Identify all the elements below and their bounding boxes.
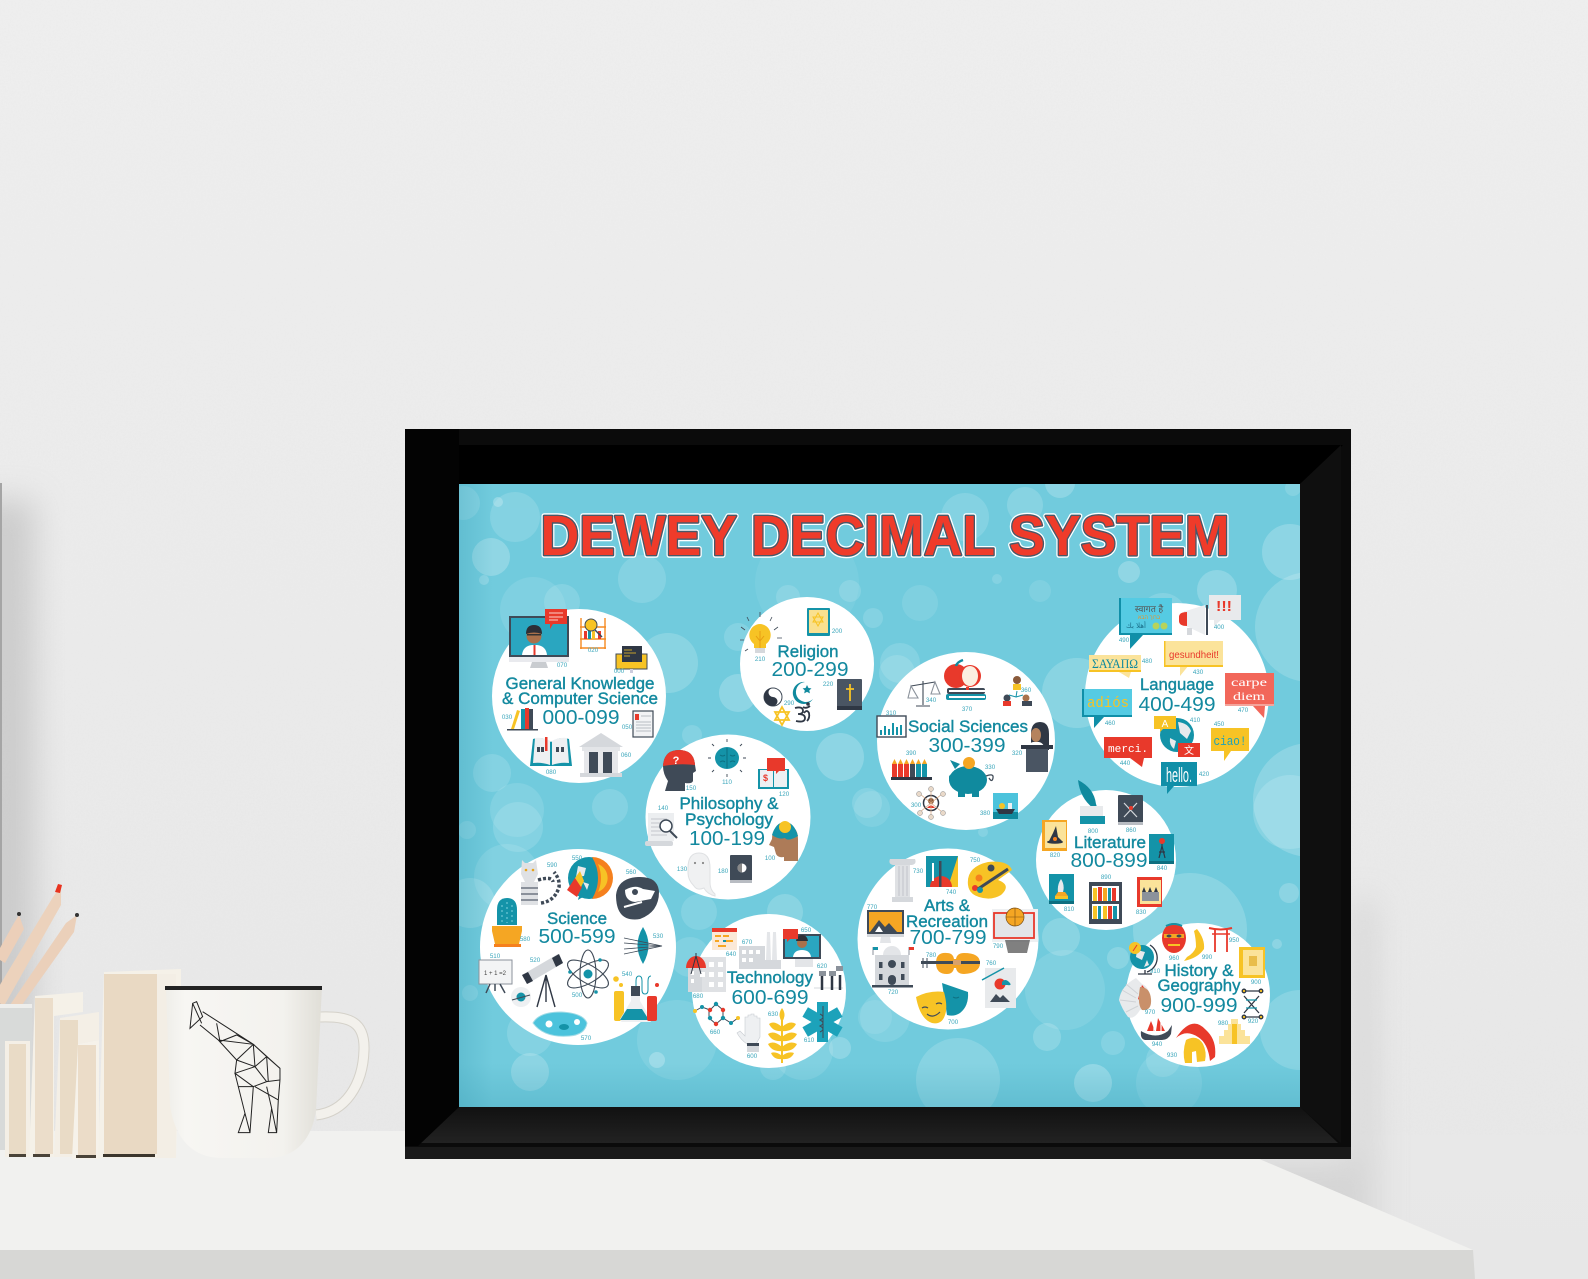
icon: atom — [564, 950, 612, 998]
number labels: 050 — [622, 724, 633, 731]
panel: technology 600-699 — [686, 914, 846, 1068]
number labels: 680 — [693, 993, 704, 1000]
heading: history and geography: 900-999 — [1160, 994, 1238, 1017]
icon: whiteboard — [479, 960, 512, 993]
icon: torii gate — [1209, 928, 1232, 952]
number labels: 940 — [1152, 1041, 1163, 1048]
icon: dark bookshelf — [1089, 882, 1122, 924]
icon: man on monitor — [783, 929, 821, 967]
number labels: 580 — [520, 936, 531, 943]
number labels: 360 — [1021, 687, 1032, 694]
heading: science — [538, 909, 616, 948]
frame outer — [405, 429, 1351, 1159]
icon: castle book — [1137, 877, 1162, 907]
icon: merci bubble — [1104, 737, 1152, 767]
number labels: 610 — [804, 1037, 815, 1044]
number labels: 950 — [1229, 937, 1240, 944]
icon: gesundheit bubble: gesundheit! — [1169, 649, 1219, 661]
icon: scales — [908, 681, 940, 706]
icon: amoeba — [533, 1012, 587, 1036]
number labels: 990 — [1202, 954, 1213, 961]
number labels — [1050, 827, 1168, 916]
number labels: 770 — [867, 904, 878, 911]
heading: technology: 600-699 — [732, 986, 808, 1009]
heading: history and geography: History & — [1164, 961, 1234, 980]
icon: tribal mask — [1162, 923, 1186, 953]
number labels: 200 — [832, 628, 843, 635]
icon: adios bubble — [1082, 689, 1132, 728]
heading: arts and recreation: 700-799 — [910, 926, 986, 949]
icon: document with magnifier — [645, 813, 677, 846]
icon: lemur — [521, 860, 559, 905]
icon: quill and inkwell — [1078, 780, 1105, 824]
number labels: 080 — [546, 769, 557, 776]
icon: dna — [1242, 989, 1263, 1019]
number labels: 520 — [530, 957, 541, 964]
icon: art tools — [926, 856, 958, 887]
bokeh background — [459, 484, 1300, 1107]
number labels: 890 — [1101, 874, 1112, 881]
heading: arts and recreation: Recreation — [906, 912, 988, 931]
number labels: 150 — [686, 785, 697, 792]
number labels: 120 — [779, 791, 790, 798]
number labels: 140 — [658, 805, 669, 812]
number labels: 340 — [926, 697, 937, 704]
panel: language 400-499 — [1082, 595, 1274, 794]
icon: gesundheit bubble — [1164, 641, 1223, 676]
heading: philosophy and psychology: Philosophy & — [680, 794, 779, 813]
number labels: 030 — [502, 714, 513, 721]
number labels: 100 — [765, 855, 776, 862]
number labels: 930 — [1167, 1052, 1178, 1059]
icon: painting of balloon — [982, 968, 1016, 1008]
number labels: 070 — [557, 662, 568, 669]
number labels: 450 — [1214, 721, 1225, 728]
heading: religion: 200-299 — [772, 658, 848, 681]
icon: ciao bubble: ciao! — [1214, 734, 1246, 749]
number labels: 000 — [614, 668, 625, 675]
icon: eiffel tower book — [1149, 834, 1174, 864]
heading: general knowledge: 000-099 — [542, 706, 620, 729]
icon: exclamation bubble — [1209, 595, 1241, 626]
icon: head with question mark — [663, 750, 696, 791]
number labels: 060 — [621, 752, 632, 759]
number labels: 720 — [888, 989, 899, 996]
book 3 — [54, 1012, 99, 1157]
icon: apple on books — [944, 660, 986, 700]
panel: science 500-599 — [479, 849, 676, 1045]
number labels: 840 — [1157, 865, 1168, 872]
number labels: 410 — [1190, 717, 1201, 724]
number labels: 530 — [653, 933, 664, 940]
icon: paint palette — [968, 862, 1012, 899]
number labels: 910 — [1150, 968, 1161, 975]
icon: star of david — [775, 707, 789, 725]
title: DEWEY DECIMAL SYSTEM — [540, 504, 1230, 568]
icon: robot hand — [737, 1014, 760, 1052]
number labels: 790 — [993, 943, 1004, 950]
heading: technology: Technology — [727, 968, 813, 987]
icon: book with speech bubble — [758, 758, 789, 789]
number labels: 600 — [747, 1053, 758, 1060]
heading: social sciences: 300-399 — [928, 734, 1006, 757]
panel: religion 200-299 — [740, 597, 874, 731]
number labels: 740 — [946, 889, 957, 896]
heading: language: Language — [1140, 675, 1214, 694]
icon: people network — [916, 786, 946, 820]
title: DEWEY DECIMAL SYSTEM — [540, 504, 1230, 568]
icon: theater masks — [916, 983, 968, 1023]
icon: ghost — [688, 853, 715, 896]
number labels: 330 — [985, 764, 996, 771]
pencils and cup — [0, 884, 79, 1150]
number labels: 130 — [677, 866, 688, 873]
heading: history and geography: Geography — [1158, 976, 1241, 995]
icon: planet — [511, 987, 531, 1007]
book 5 — [98, 969, 181, 1158]
panel: arts and recreation 700-799 — [858, 848, 1038, 1030]
frame bevel top — [412, 445, 1343, 484]
number labels: 800 — [1088, 828, 1099, 835]
icon: teacher on monitor — [509, 609, 569, 668]
icon: bible — [837, 679, 862, 710]
icon: viking ship — [1141, 1018, 1172, 1040]
heading: religion: Religion — [778, 642, 838, 661]
mug rim — [165, 986, 322, 990]
icon: agape bubble: ΣΑΥΑΠΩ — [1092, 656, 1138, 671]
number labels — [693, 927, 828, 1060]
heading: history and geography — [1158, 961, 1241, 1017]
number labels — [867, 857, 1004, 1026]
number labels: 970 — [1145, 1009, 1156, 1016]
icon: hello bubble — [1161, 762, 1197, 794]
icon: whiteboard: 1 + 1 =2 — [484, 971, 507, 977]
poster edge shading — [459, 484, 1300, 1107]
icon: megaphone — [1179, 605, 1208, 635]
number labels: 500 — [572, 992, 583, 999]
number labels: 380 — [980, 810, 991, 817]
icon: greek column — [889, 859, 916, 902]
icon: piggy bank — [949, 757, 993, 797]
icon: globe with translation bubbles: A — [1162, 719, 1169, 730]
icon: globe with translation bubbles: 文 — [1184, 744, 1194, 757]
icon: witch hat book — [1042, 820, 1067, 851]
icon: museum — [579, 733, 623, 777]
pencils — [0, 884, 79, 1006]
number labels: 860 — [1126, 827, 1137, 834]
icon: plugs — [814, 966, 843, 990]
number labels: 390 — [906, 750, 917, 757]
icon: wheat — [768, 1008, 797, 1063]
icon: lens and light rays — [624, 927, 662, 964]
number labels: 510 — [490, 953, 501, 960]
heading: science: Science — [547, 909, 607, 928]
heading: language — [1138, 675, 1216, 716]
number labels: 370 — [962, 706, 973, 713]
icon: head with question mark: ? — [673, 755, 680, 767]
icon: adios bubble: adiós — [1087, 695, 1129, 712]
icon: earth core — [567, 857, 613, 900]
heading: literature: Literature — [1074, 833, 1146, 852]
icon: factory — [739, 932, 781, 969]
number labels — [1145, 937, 1262, 1059]
heading: language: 400-499 — [1138, 693, 1216, 716]
number labels: 550 — [572, 855, 583, 862]
number labels: 900 — [1251, 979, 1262, 986]
icon: drafting compass on building — [686, 953, 726, 992]
number labels: 760 — [986, 960, 997, 967]
number labels: 620 — [817, 963, 828, 970]
icon: welcome bubble — [1119, 598, 1172, 649]
heading: science: 500-599 — [538, 925, 616, 948]
shelf front face — [0, 1250, 1475, 1279]
number labels: 460 — [1105, 720, 1116, 727]
mug handle — [316, 1017, 364, 1115]
icon: globe with translation bubbles — [1154, 716, 1200, 757]
heading: technology — [727, 968, 813, 1009]
cup — [0, 1004, 32, 1150]
number labels — [755, 628, 843, 707]
shelf top surface — [0, 1131, 1473, 1250]
wall shadow beside frame — [1240, 900, 1375, 1250]
icon: calendar — [712, 928, 737, 950]
heading: general knowledge — [502, 674, 658, 729]
icon: brain — [708, 739, 746, 777]
book 4 — [72, 1040, 99, 1159]
number labels: 490 — [1119, 637, 1130, 644]
panel: history and geography 900-999 — [1119, 923, 1270, 1067]
heading: philosophy and psychology: 100-199 — [689, 827, 765, 850]
icon: three people network — [1003, 676, 1032, 706]
heading: literature: 800-899 — [1070, 849, 1148, 872]
number labels: 430 — [1193, 669, 1204, 676]
heading: religion — [772, 642, 848, 681]
icon: dark sword book — [1118, 795, 1143, 825]
mug with giraffe — [165, 986, 364, 1158]
icon: spartan helmet — [1176, 1024, 1215, 1063]
icon: merci bubble: merci. — [1108, 744, 1148, 756]
panel: philosophy and psychology 100-199 — [645, 734, 810, 900]
number labels: 480 — [1142, 658, 1153, 665]
poster background — [459, 484, 1300, 1107]
icon: pyramid — [1219, 1019, 1250, 1044]
panel: literature 800-899 — [1036, 780, 1176, 930]
icon: agape bubble — [1089, 655, 1141, 678]
number labels: 730 — [913, 868, 924, 875]
frame bevel right — [1300, 445, 1341, 1143]
book 2 — [29, 992, 83, 1157]
icon: chemistry flasks — [613, 976, 659, 1022]
number labels: 290 — [784, 700, 795, 707]
heading: arts and recreation — [906, 896, 988, 949]
wall shadow at left — [0, 500, 35, 1140]
icon: cargo ship picture — [993, 793, 1018, 819]
icon: medical star — [802, 1002, 843, 1042]
number labels: 570 — [581, 1035, 592, 1042]
number labels: 640 — [726, 951, 737, 958]
number labels: 700 — [948, 1019, 959, 1026]
number labels: 420 — [1199, 771, 1210, 778]
icon: light bulb — [740, 612, 782, 653]
icon: tablet — [633, 711, 653, 737]
icon: exclamation bubble: !!! — [1216, 598, 1232, 615]
mug body — [166, 986, 322, 1158]
icon: welcome bubble: स्वागत है — [1135, 603, 1163, 614]
icon: candles bar row — [891, 759, 932, 780]
number labels: 660 — [710, 1029, 721, 1036]
number labels: 920 — [1248, 1018, 1259, 1025]
panel: social sciences 300-399 — [877, 652, 1055, 830]
icon: crescent and star — [793, 682, 813, 704]
icon: monitor with landscape — [867, 910, 904, 943]
number labels — [490, 855, 664, 1042]
heading: literature — [1070, 833, 1148, 872]
number labels: 960 — [1169, 955, 1180, 962]
number labels: 650 — [801, 927, 812, 934]
icon: welcome bubble: ברוך הבא — [1138, 615, 1161, 621]
icon: ancient book — [1239, 947, 1265, 978]
number labels: 780 — [926, 952, 937, 959]
frame bevel bottom — [418, 1107, 1338, 1143]
icon: telescope — [522, 954, 563, 1007]
heading: general knowledge: & Computer Science — [502, 689, 658, 708]
icon: carpe diem bubble: diem — [1233, 689, 1266, 703]
icon: chart on screen — [877, 716, 906, 737]
icon: rocket book — [1049, 874, 1074, 904]
number labels: 590 — [547, 862, 558, 869]
number labels: 630 — [768, 1011, 779, 1018]
heading: arts and recreation: Arts & — [924, 896, 971, 915]
panel: general knowledge 000-099 — [492, 609, 666, 783]
icon: hello bubble: hello. — [1166, 765, 1192, 787]
giraffe line art — [190, 1002, 280, 1133]
number labels — [886, 687, 1032, 817]
number labels: 750 — [970, 857, 981, 864]
number labels: 310 — [886, 710, 897, 717]
number labels — [502, 647, 633, 776]
icon: yellow computer with code — [616, 646, 647, 673]
icon: books on shelf — [507, 708, 538, 730]
shelf — [0, 1131, 1475, 1279]
number labels: 400 — [1214, 624, 1225, 631]
book 1 — [5, 1041, 30, 1157]
icon: violin — [921, 953, 980, 974]
icon: globe with compass — [1129, 942, 1157, 974]
number labels: 540 — [622, 971, 633, 978]
poster — [459, 484, 1300, 1107]
icon: woman at podium — [1021, 722, 1053, 772]
number labels: 470 — [1238, 707, 1249, 714]
icon: bookshelf with magnifier — [580, 618, 606, 649]
number labels: 820 — [1050, 852, 1061, 859]
icon: basketball hoop — [992, 908, 1038, 953]
picture frame — [405, 429, 1367, 1159]
number labels: 560 — [626, 869, 637, 876]
icon: open book — [530, 737, 572, 766]
number labels: 220 — [823, 681, 834, 688]
object edge at left margin — [0, 483, 2, 1023]
icon: boomerang — [1184, 929, 1204, 961]
number labels: 830 — [1136, 909, 1147, 916]
stack of books — [5, 969, 181, 1159]
icon: carpe diem bubble — [1225, 673, 1274, 718]
icon: feather headdress — [1119, 978, 1151, 1018]
heading: philosophy and psychology: Psychology — [685, 810, 774, 829]
number labels: 180 — [718, 868, 729, 875]
icon: star of david book — [807, 608, 830, 636]
icon: welcome bubble: أهلا بك — [1126, 621, 1146, 630]
number labels — [658, 779, 790, 875]
icon: monument building — [872, 946, 914, 988]
icon: cactus in pot — [492, 898, 522, 947]
heading: social sciences — [908, 717, 1028, 757]
icon: om symbol — [795, 703, 810, 722]
number labels: 320 — [1012, 750, 1023, 757]
heading: social sciences: Social Sciences — [908, 717, 1028, 736]
icon: book with speech bubble: $ — [763, 773, 768, 783]
number labels: 110 — [722, 779, 732, 786]
number labels — [1105, 624, 1249, 778]
number labels: 440 — [1120, 760, 1131, 767]
icon: dinosaur fossil — [616, 877, 659, 920]
icon: molecule — [693, 1002, 740, 1026]
heading: philosophy and psychology — [680, 794, 779, 850]
number labels: 670 — [742, 939, 753, 946]
icon: head with lightbulb — [769, 821, 798, 861]
number labels: 020 — [588, 647, 599, 654]
icon: yin yang book — [730, 855, 752, 883]
number labels: 210 — [755, 656, 766, 663]
number labels: 980 — [1218, 1020, 1229, 1027]
icon: carpe diem bubble: carpe — [1231, 675, 1267, 689]
heading: general knowledge: General Knowledge — [506, 674, 654, 693]
icon: ciao bubble — [1211, 728, 1249, 761]
number labels: 300 — [911, 802, 922, 809]
icon: yin yang — [764, 688, 782, 706]
number labels: 810 — [1064, 906, 1075, 913]
